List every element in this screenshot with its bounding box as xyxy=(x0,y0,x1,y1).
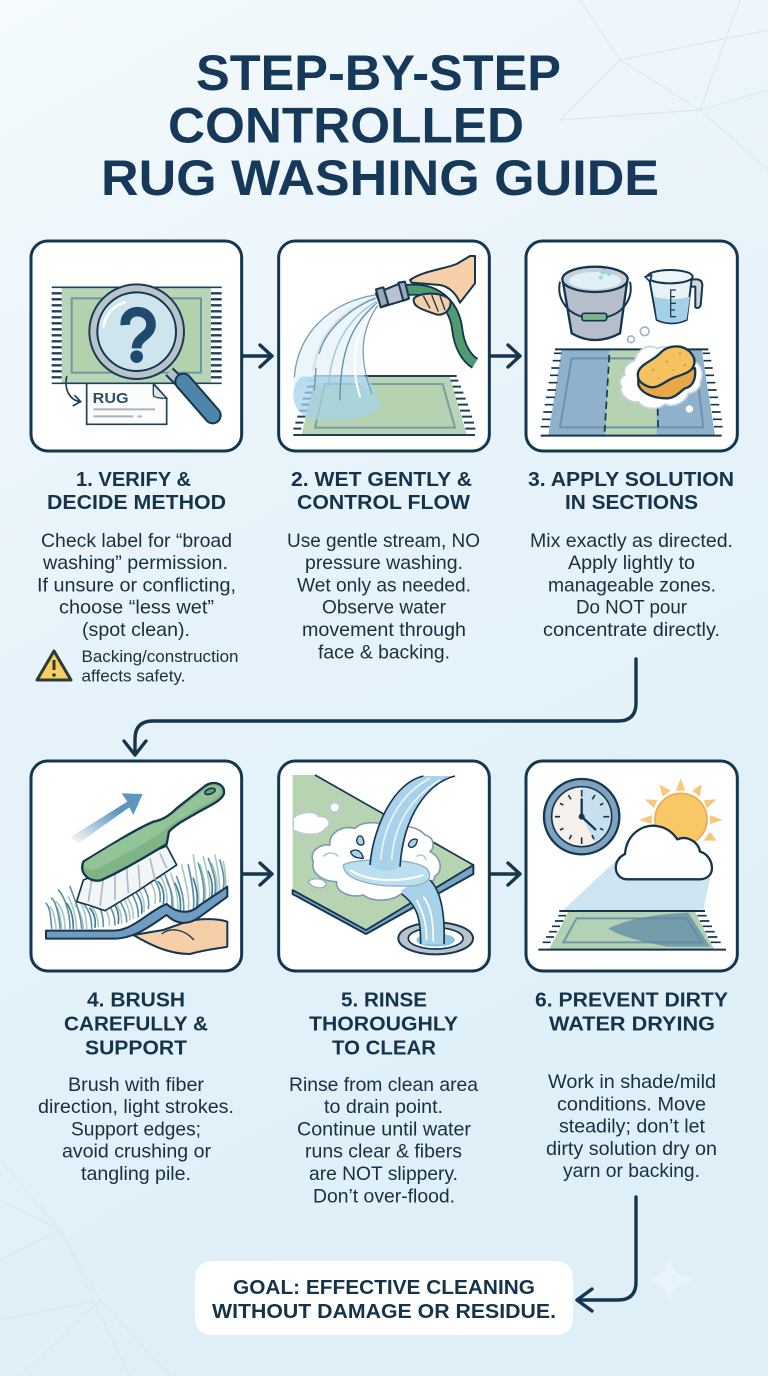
icon: cloud xyxy=(616,826,712,879)
text block: step 4: direction, light strokes. xyxy=(38,1096,234,1118)
text block: step 1: choose “less wet” xyxy=(59,596,214,618)
text block: step 2: Wet only as needed. xyxy=(297,574,471,596)
icon: hand supporting rug xyxy=(46,887,227,954)
icon: rug slab xyxy=(293,775,473,934)
connector arrow: row 1 to row 2 xyxy=(124,659,636,755)
text block: step 2: Use gentle stream, NO xyxy=(287,530,480,552)
arrow: step 2 to 3 xyxy=(490,345,520,367)
icon: water stream into drain xyxy=(343,776,473,954)
callout: backing warning: affects safety. xyxy=(82,666,186,686)
icon: shade beam xyxy=(563,857,710,910)
icon: rug with fringe xyxy=(52,287,222,383)
text block: step 3: IN SECTIONS xyxy=(565,491,698,514)
text block: step 3: 3. APPLY SOLUTION xyxy=(528,468,734,491)
text block: step 4: Brush with fiber xyxy=(68,1074,205,1096)
text block: step 2: pressure washing. xyxy=(305,552,463,574)
text block: step 1: If unsure or conflicting, xyxy=(37,574,236,596)
text block: step 1 xyxy=(37,468,236,641)
text block: step 3: Mix exactly as directed. xyxy=(530,530,733,552)
panel: step 1 illustration xyxy=(31,241,242,451)
panel: step 5 illustration xyxy=(279,761,489,971)
text block: step 1: Check label for “broad xyxy=(41,530,232,552)
connector arrow: to goal xyxy=(577,1197,636,1311)
text block: step 2 xyxy=(287,468,480,664)
icon: sponge with foam xyxy=(620,327,702,413)
panel: step 3 illustration xyxy=(526,241,737,451)
text block: step 1: washing” permission. xyxy=(42,552,228,574)
text block: step 6 xyxy=(535,988,728,1182)
icon: direction arrow xyxy=(70,793,143,843)
text block: step 5: Rinse from clean area xyxy=(289,1074,478,1096)
text block: step 3: Apply lightly to xyxy=(568,552,695,574)
text block: step 6: 6. PREVENT DIRTY xyxy=(535,988,728,1012)
text block: step 3: Do NOT pour xyxy=(576,596,688,618)
callout: goal: GOAL: EFFECTIVE CLEANING xyxy=(233,1276,535,1299)
text block: step 4: Support edges; xyxy=(71,1118,201,1140)
icon: hose in hand xyxy=(376,256,475,363)
arrow: step 1 to 2 xyxy=(243,345,272,367)
text block: step 3 xyxy=(528,468,734,641)
text block: step 6: conditions. Move xyxy=(557,1094,706,1116)
text block: step 2: CONTROL FLOW xyxy=(297,491,471,514)
arrow: step 4 to 5 xyxy=(243,863,272,885)
text block: step 5: Continue until water xyxy=(297,1118,472,1140)
text block: step 1: DECIDE METHOD xyxy=(47,491,226,514)
text block: step 5 xyxy=(289,988,478,1208)
text block: step 6: yarn or backing. xyxy=(563,1160,700,1182)
text block: step 3: manageable zones. xyxy=(548,574,716,596)
text block: step 5: THOROUGHLY xyxy=(309,1012,458,1036)
icon: sparkle xyxy=(647,1258,693,1303)
callout: backing warning xyxy=(82,647,238,686)
text block: step 5: 5. RINSE xyxy=(341,988,427,1012)
title: CONTROLLED xyxy=(168,98,524,154)
icon: rug in sections xyxy=(541,349,723,436)
text block: step 4 xyxy=(38,988,234,1185)
text block: step 4: CAREFULLY & xyxy=(64,1012,208,1036)
callout: backing warning: Backing/construction xyxy=(82,647,238,666)
icon: care label: RUG xyxy=(93,390,129,407)
text block: step 4: avoid crushing or xyxy=(62,1140,212,1162)
title xyxy=(101,45,659,206)
panel: step 2 illustration xyxy=(279,241,489,451)
text block: step 5: to drain point. xyxy=(324,1096,443,1118)
text block: step 2: 2. WET GENTLY & xyxy=(291,468,472,491)
icon: rug in shade xyxy=(538,911,726,950)
icon: warning triangle xyxy=(37,651,71,680)
text block: step 6: WATER DRYING xyxy=(549,1012,715,1036)
text block: step 5: TO CLEAR xyxy=(332,1036,436,1060)
text block: step 5: runs clear & fibers xyxy=(305,1140,462,1162)
title: STEP-BY-STEP xyxy=(196,45,561,101)
text block: step 2: face & backing. xyxy=(318,642,450,664)
icon: care label xyxy=(66,377,167,424)
text block: step 4: SUPPORT xyxy=(85,1036,187,1060)
panel: step 4 illustration xyxy=(31,761,242,971)
icon: sun xyxy=(639,778,722,845)
arrow: step 5 to 6 xyxy=(490,863,520,885)
callout: goal: WITHOUT DAMAGE OR RESIDUE. xyxy=(212,1300,556,1323)
title: RUG WASHING GUIDE xyxy=(101,150,659,206)
icon: rug xyxy=(293,376,475,435)
icon: measuring cup xyxy=(645,270,702,323)
text block: step 4: 4. BRUSH xyxy=(87,988,185,1012)
icon: bucket xyxy=(559,267,631,340)
text block: step 2: movement through xyxy=(302,619,466,641)
icon: grass pile xyxy=(46,855,226,928)
text block: step 3: concentrate directly. xyxy=(543,619,720,641)
callout: goal xyxy=(195,1261,573,1335)
icon: scrubbing brush xyxy=(77,783,224,911)
text block: step 1: 1. VERIFY & xyxy=(76,468,191,491)
text block: step 2: Observe water xyxy=(322,596,447,618)
icon: magnifying glass with question mark xyxy=(89,284,213,415)
text block: step 6: steadily; don’t let xyxy=(559,1116,706,1138)
icon: water spray xyxy=(293,293,381,421)
text block: step 6: dirty solution dry on xyxy=(546,1138,717,1160)
panel: step 6 illustration xyxy=(526,761,737,971)
text block: step 5: are NOT slippery. xyxy=(309,1163,458,1185)
icon: clock xyxy=(544,779,619,854)
text block: step 6: Work in shade/mild xyxy=(548,1071,716,1093)
icon: soap foam xyxy=(293,803,440,900)
text block: step 1: (spot clean). xyxy=(82,619,190,641)
text block: step 5: Don’t over-flood. xyxy=(313,1186,455,1208)
text block: step 4: tangling pile. xyxy=(81,1163,191,1185)
